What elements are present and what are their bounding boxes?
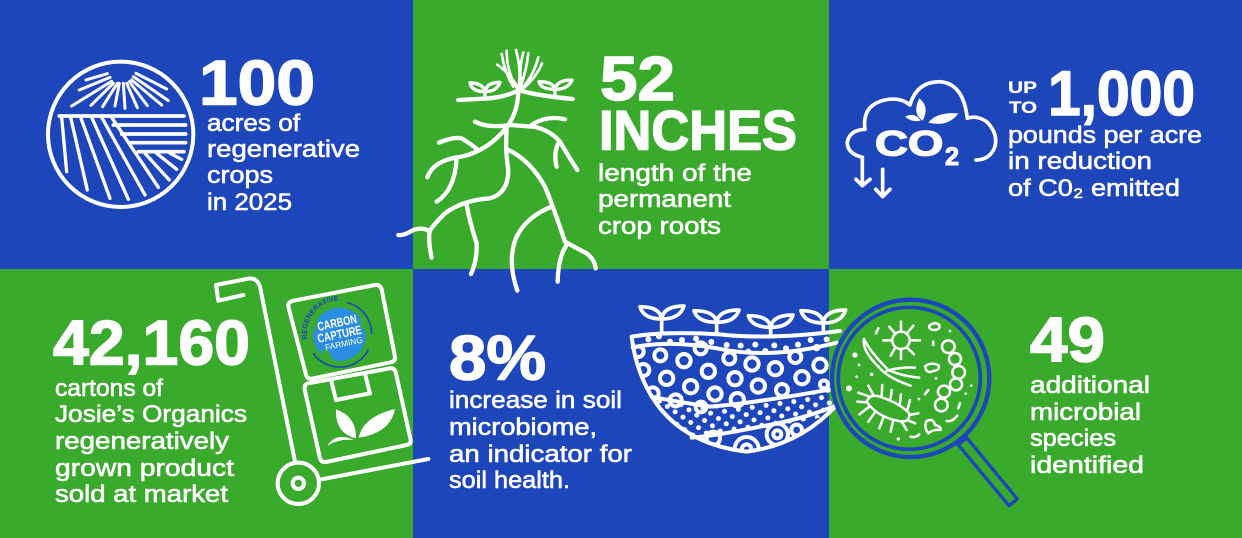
icon: crop roots xyxy=(398,50,596,291)
panel: 8% microbiome background xyxy=(413,269,829,538)
stat: up to 1,000 pounds: in reduction xyxy=(1008,148,1152,175)
sprouts xyxy=(640,306,846,337)
stat: 100 acres: 100 xyxy=(199,48,315,118)
icon: soil cross-section with sprouts xyxy=(632,306,846,461)
microbes xyxy=(857,322,965,437)
stat: 42,160 cartons: regeneratively xyxy=(55,428,229,455)
badge: carbon capture farming: CAPTURE xyxy=(316,323,363,346)
stat: 100 acres: acres of xyxy=(207,110,300,137)
panel: 42,160 cartons background xyxy=(0,269,413,538)
stat: 52 inches: crop roots xyxy=(598,213,721,240)
stat: 8% soil microbiome: 8% xyxy=(449,324,546,394)
icon: magnifying glass with microbes xyxy=(832,300,1017,506)
stat: 8% soil microbiome: an indicator for xyxy=(449,441,632,468)
stat: 8% soil microbiome: soil health. xyxy=(449,467,570,494)
stat: up to 1,000 pounds: of C0₂ emitted xyxy=(1008,175,1180,202)
stat: 100 acres xyxy=(199,48,360,216)
stat: 49 microbial species: 49 xyxy=(1030,306,1105,376)
stat: 49 microbial species: species xyxy=(1030,425,1116,452)
stat: 100 acres: crops xyxy=(207,162,273,189)
stat: 52 inches: permanent xyxy=(598,186,731,213)
icon: CO2 cloud with arrows: CO xyxy=(875,124,943,163)
stat: 100 acres: in 2025 xyxy=(207,189,292,216)
stat: up to 1,000 pounds: UP xyxy=(1008,78,1037,97)
icon: hand truck with cartons xyxy=(214,276,430,506)
badge: carbon capture farming: REGENERATIVE xyxy=(302,296,339,340)
badge: carbon capture farming xyxy=(302,296,372,368)
stat: 49 microbial species xyxy=(1030,306,1150,479)
panel: 49 species background xyxy=(829,269,1242,538)
stat: up to 1,000 pounds: pounds per acre xyxy=(1008,122,1202,149)
stat: 52 inches: length of the xyxy=(598,160,752,187)
stat: 42,160 cartons: Josie’s Organics xyxy=(55,401,247,428)
stat: 8% soil microbiome: increase in soil xyxy=(449,387,622,414)
stat: 8% soil microbiome: microbiome, xyxy=(449,414,597,441)
stat: 49 microbial species: additional xyxy=(1030,372,1150,399)
soil outlines xyxy=(632,331,840,452)
dotted band xyxy=(657,392,832,434)
circles layer xyxy=(633,342,828,461)
stat: 52 inches xyxy=(598,45,797,240)
icon: CO2 cloud with arrows: 2 xyxy=(945,143,959,171)
stat: 42,160 cartons: grown product xyxy=(55,455,234,482)
small dots layer xyxy=(645,333,830,355)
stat: 49 microbial species: microbial xyxy=(1030,399,1141,426)
stat: 42,160 cartons xyxy=(53,308,250,508)
stat: 52 inches: 52 xyxy=(600,45,675,114)
stat: 42,160 cartons: cartons of xyxy=(55,375,163,402)
stat: 42,160 cartons: sold at market xyxy=(55,481,228,508)
panel: CO2 reduction background xyxy=(829,0,1242,269)
stat: 100 acres: regenerative xyxy=(207,136,360,163)
stat: 52 inches: INCHES xyxy=(599,98,797,162)
stat: up to 1,000 pounds: 1,000 xyxy=(1048,59,1195,129)
stat: up to 1,000 pounds xyxy=(1008,59,1202,202)
stat: 8% soil microbiome xyxy=(449,324,632,494)
stat: 49 microbial species: identified xyxy=(1030,452,1144,479)
icon: sun over crop field xyxy=(48,62,193,207)
panel: 52 inches background xyxy=(413,0,829,269)
stat: up to 1,000 pounds: TO xyxy=(1009,98,1037,117)
badge: carbon capture farming: FARMING xyxy=(324,335,364,352)
badge: carbon capture farming: CARBON xyxy=(316,312,358,334)
stat: 42,160 cartons: 42,160 xyxy=(53,308,250,378)
icon: CO2 cloud with arrows xyxy=(847,82,996,197)
panel: 100 acres background xyxy=(0,0,413,269)
